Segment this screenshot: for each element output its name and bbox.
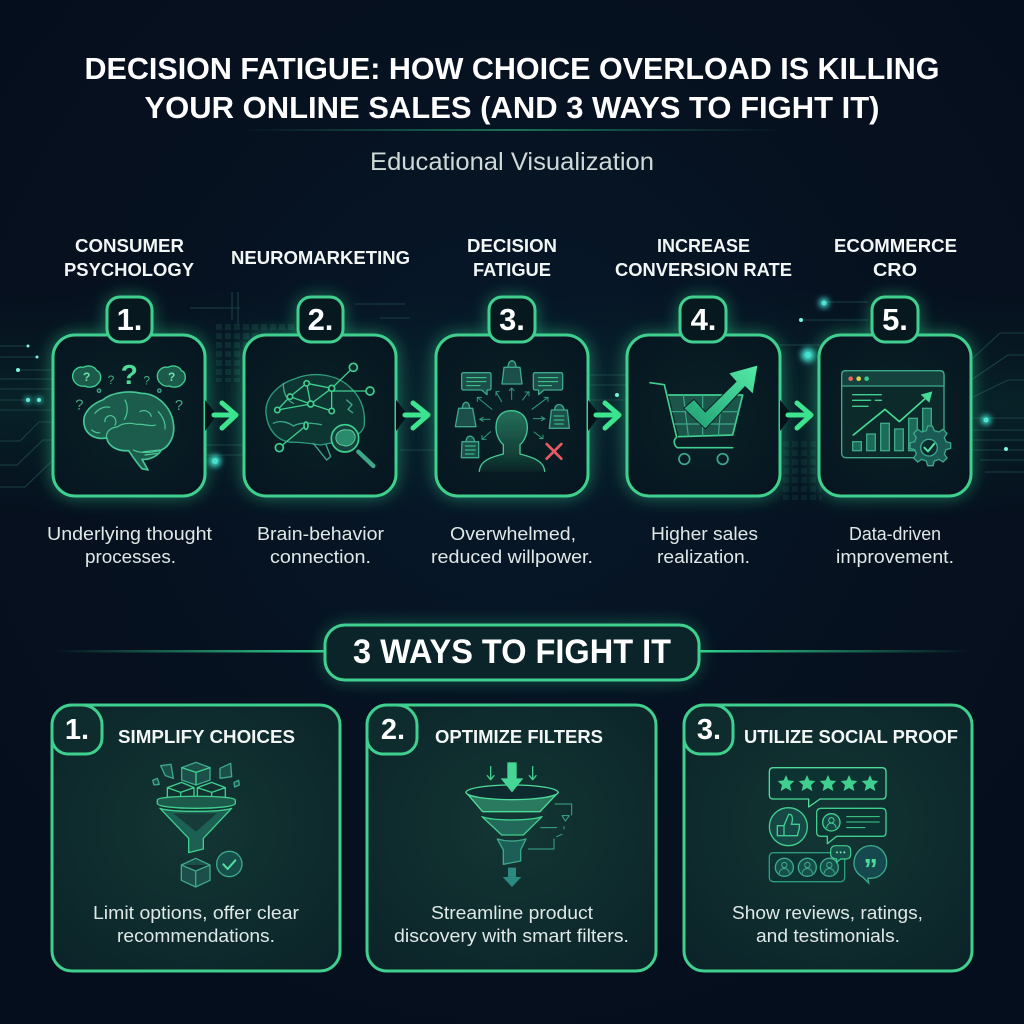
icon: brain with question marks: ? — [75, 397, 83, 413]
description: step 3: Overwhelmed, — [450, 524, 576, 544]
description: step 3: reduced willpower. — [431, 547, 593, 567]
icon: layered filter funnel — [466, 762, 572, 887]
badge 1: 1. — [65, 714, 89, 746]
description: step 4: Higher sales — [651, 524, 758, 544]
description: step 5: improvement. — [836, 547, 954, 567]
panel: step 3 card — [436, 297, 588, 496]
card description: and testimonials. — [756, 926, 900, 946]
heading: ecommerce cro: ECOMMERCE — [834, 236, 957, 256]
icon: reviews and ratings — [769, 768, 887, 886]
badge 2: 2. — [381, 714, 405, 746]
badge 1 — [52, 705, 102, 754]
icon: brain with question marks: ? — [143, 374, 150, 388]
description: step 1 — [47, 524, 212, 567]
icon: brain with question marks: ? — [108, 373, 115, 387]
title: YOUR ONLINE SALES (AND 3 WAYS TO FIGHT IT) — [144, 90, 880, 125]
icon: brain with question marks — [73, 359, 185, 470]
heading: consumer psychology — [64, 236, 194, 280]
card description: Streamline product — [431, 903, 593, 923]
title — [84, 51, 940, 125]
icon: funnel with boxes — [153, 762, 242, 887]
icon: overwhelmed person with options — [455, 361, 569, 471]
arrow: step 2 to 3 — [396, 400, 428, 431]
card description: discovery with smart filters. — [394, 926, 629, 946]
description: step 5: Data-driven — [849, 524, 941, 544]
description: step 3 — [431, 524, 593, 567]
heading: ecommerce cro — [834, 236, 957, 280]
card description — [394, 903, 629, 946]
heading: increase conversion rate — [615, 236, 792, 280]
panel: optimize filters — [367, 705, 656, 971]
icon: brain with question marks: ? — [175, 398, 183, 414]
subtitle: Educational Visualization — [370, 148, 654, 176]
icon: brain with question marks: ? — [121, 359, 138, 390]
step number 5: 5. — [882, 302, 908, 337]
description: step 1: processes. — [85, 547, 176, 567]
card heading: UTILIZE SOCIAL PROOF — [744, 727, 958, 747]
card description — [93, 903, 299, 946]
panel: step 5 card — [819, 297, 971, 496]
step number 4: 4. — [691, 302, 716, 337]
title: DECISION FATIGUE: HOW CHOICE OVERLOAD IS KILLING — [84, 51, 940, 86]
heading: decision fatigue: FATIGUE — [473, 260, 551, 280]
section heading: 3 ways to fight it — [52, 625, 972, 680]
badge 3: 3. — [697, 714, 721, 746]
panel: utilize social proof — [684, 705, 972, 971]
description: step 2: connection. — [270, 547, 371, 567]
panel: step 1 card — [53, 297, 205, 496]
panel: simplify choices — [52, 705, 340, 971]
badge 3 — [684, 705, 733, 754]
heading: decision fatigue: DECISION — [467, 236, 557, 256]
icon: dashboard chart with gear — [842, 371, 951, 466]
heading: increase conversion rate: INCREASE — [657, 236, 750, 256]
description: step 5 — [836, 524, 954, 567]
card heading: SIMPLIFY CHOICES — [118, 727, 295, 747]
description: step 2 — [257, 524, 384, 567]
icon: brain with question marks: ? — [83, 370, 90, 384]
card description — [732, 903, 923, 946]
card heading: OPTIMIZE FILTERS — [435, 727, 603, 747]
badge 2 — [367, 705, 417, 754]
arrow: step 3 to 4 — [588, 400, 619, 431]
section heading: 3 ways to fight it: 3 WAYS TO FIGHT IT — [353, 633, 671, 671]
heading: consumer psychology: PSYCHOLOGY — [64, 260, 194, 280]
card description: recommendations. — [117, 926, 275, 946]
icon: reviews and ratings: ” — [864, 854, 878, 886]
description: step 1: Underlying thought — [47, 524, 212, 544]
step number 3: 3. — [499, 302, 525, 337]
card description: Limit options, offer clear — [93, 903, 299, 923]
description: step 2: Brain-behavior — [257, 524, 384, 544]
description: step 4 — [651, 524, 758, 567]
icon: cart with growth check arrow — [650, 366, 757, 464]
icon: brain network with magnifier — [266, 363, 374, 466]
heading: consumer psychology: CONSUMER — [75, 236, 184, 256]
panel: step 4 card — [627, 297, 780, 496]
heading: neuromarketing: NEUROMARKETING — [231, 248, 410, 268]
step number 2: 2. — [308, 302, 333, 337]
card description: Show reviews, ratings, — [732, 903, 923, 923]
arrow: step 4 to 5 — [780, 400, 811, 431]
arrow: step 1 to 2 — [205, 400, 236, 431]
heading: ecommerce cro: CRO — [873, 260, 917, 280]
heading: increase conversion rate: CONVERSION RATE — [615, 260, 792, 280]
description: step 4: realization. — [657, 547, 750, 567]
heading: decision fatigue — [467, 236, 557, 280]
step number 1: 1. — [117, 302, 142, 337]
icon: brain with question marks: ? — [168, 370, 175, 384]
panel: step 2 card — [244, 297, 396, 496]
